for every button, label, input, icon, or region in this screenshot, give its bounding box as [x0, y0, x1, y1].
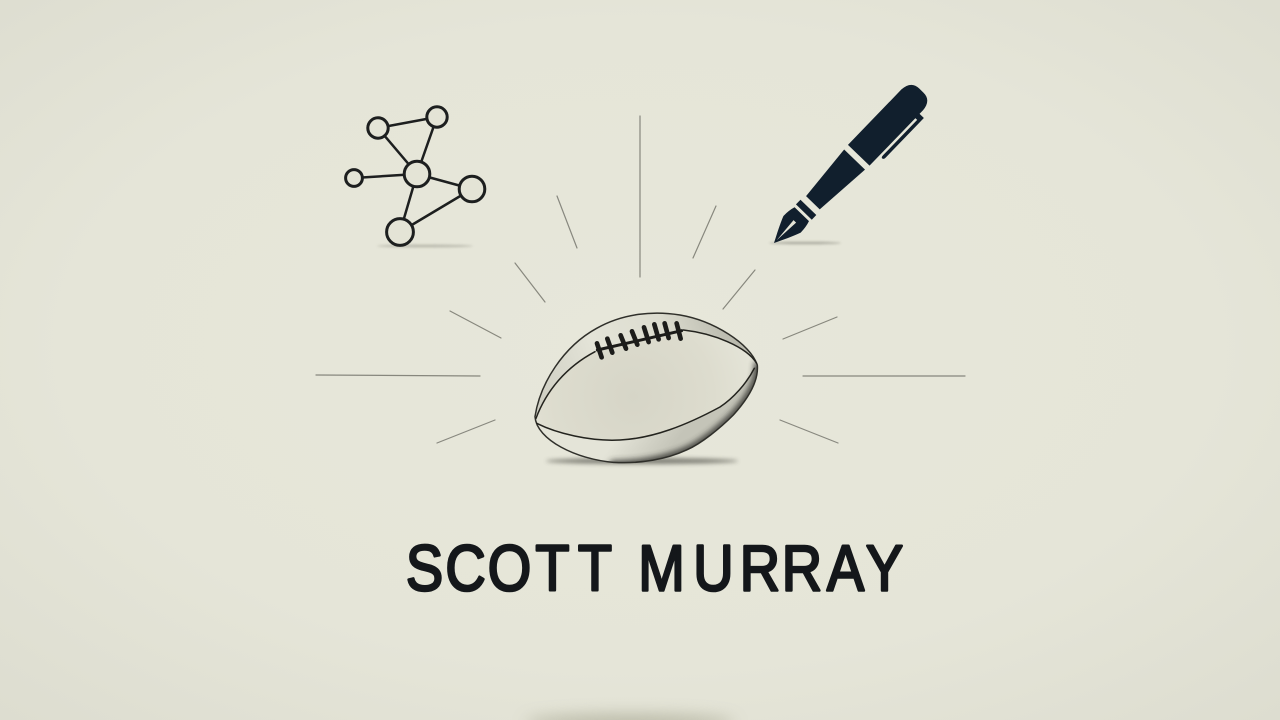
ball lower panel: [537, 365, 757, 463]
nib slit: [775, 220, 796, 241]
ball upper panel: [536, 313, 757, 418]
ball seams: [536, 330, 757, 440]
pen clip: [879, 113, 924, 160]
icon: network graph: [346, 107, 485, 247]
pen body: [763, 80, 936, 258]
icon: rugby ball: [535, 313, 757, 464]
pen shadow: [769, 242, 841, 244]
ball outline: [535, 313, 757, 463]
network edges: [354, 117, 472, 232]
ball edge shading: [613, 365, 757, 464]
network nodes: [346, 107, 485, 245]
ball body: [535, 313, 757, 463]
bottom edge shadow: [525, 715, 735, 720]
radiating lines around ball: [316, 116, 965, 443]
ball drawing: [535, 313, 757, 464]
ball laces: [597, 323, 682, 357]
pen cap: [848, 80, 932, 166]
pen ring: [796, 200, 816, 220]
icon: fountain pen: [763, 80, 936, 258]
ball shadow: [546, 458, 738, 464]
pen nib: [765, 206, 810, 251]
network shadow: [377, 245, 473, 247]
title: SCOTT MURRAY: [406, 532, 903, 604]
pen barrel: [802, 149, 865, 213]
